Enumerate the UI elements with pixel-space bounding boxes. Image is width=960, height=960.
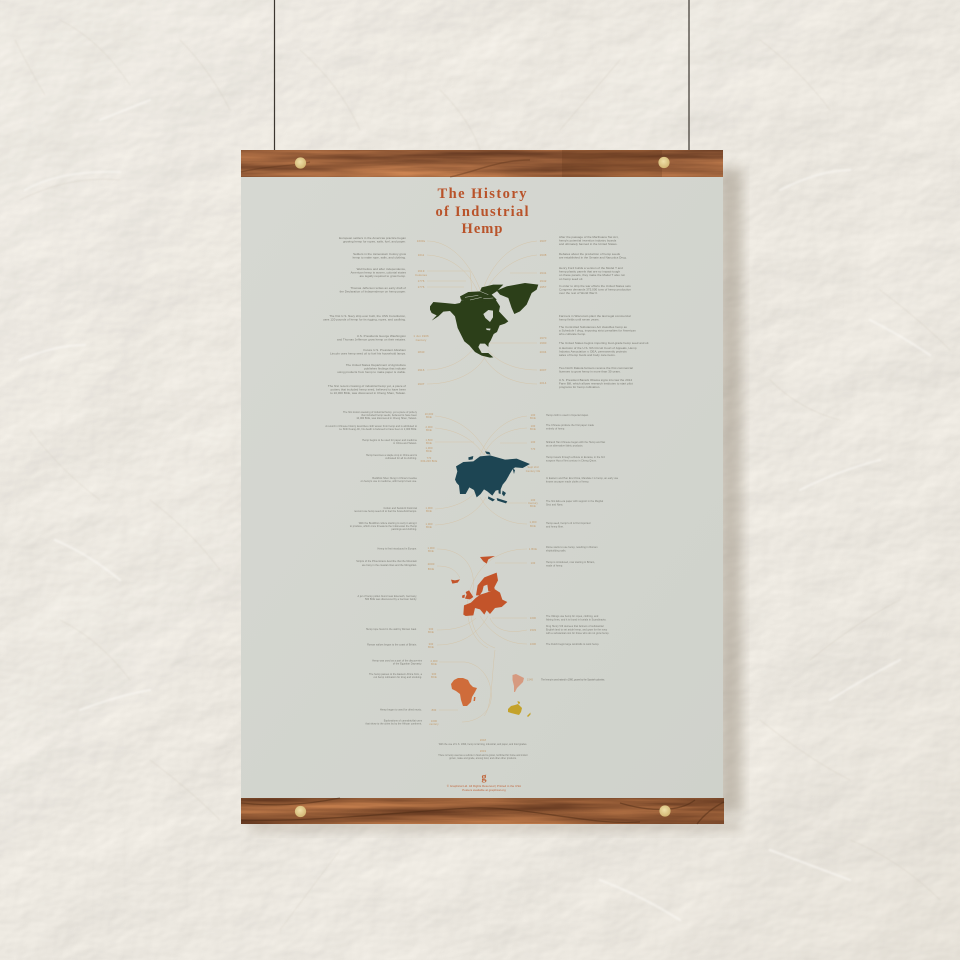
left column events: in China and Taiwan. bbox=[393, 442, 417, 445]
right column dates: 100 bbox=[531, 561, 536, 565]
right column dates: 2014 bbox=[540, 381, 547, 385]
right column events: Sect and Nara. bbox=[546, 504, 563, 506]
left column dates: BCE bbox=[426, 428, 432, 432]
right column events: Debates about the production of hemp seeds bbox=[559, 252, 621, 256]
right column dates: 1990 bbox=[540, 341, 547, 345]
connector arcs bbox=[439, 650, 495, 722]
right column events: The Dutch begin large windmills to work hemp. bbox=[546, 643, 599, 646]
right column dates: Century CE bbox=[526, 469, 540, 473]
footer logo: g bbox=[482, 772, 486, 783]
map: Asia bbox=[455, 451, 530, 503]
brass screw left bbox=[295, 157, 306, 169]
left column dates: 800 bbox=[432, 708, 437, 712]
left column events: The hemp passes to the Eastern Africa from, a bbox=[369, 673, 423, 676]
left column events: The first known weaving of industrial hemp, yet a piece of pottery bbox=[343, 411, 418, 414]
left column events: Scripts of the Phoenicians describe that the Mountain bbox=[356, 560, 418, 563]
left column dates bbox=[429, 659, 439, 726]
right column dates: Sept 2nd bbox=[527, 465, 539, 469]
right column events bbox=[559, 235, 649, 389]
right column events: In Eastern and Han Era China, Mandate I is hemp, an early use bbox=[546, 477, 619, 480]
left column events: The first U.S. Navy ship ever built, the USS Constitution, bbox=[329, 314, 406, 318]
left column events: hemp to make rope, sails, and clothing. bbox=[353, 256, 406, 260]
right column events: Two North Dakota farmers receive the first commercial bbox=[559, 366, 633, 370]
left column dates: 600-200 BCE bbox=[421, 459, 437, 463]
left column events: Cotton and Sanskrit historical bbox=[383, 507, 417, 510]
right column events: Industry Association v. DEA, permanently protects bbox=[559, 350, 627, 354]
left column dates: 10,000 bbox=[425, 412, 434, 416]
left column events bbox=[323, 236, 407, 395]
left column dates: 1,000 bbox=[426, 522, 433, 526]
left column events: Lincoln uses hemp seed oil to fuel his household lamps. bbox=[330, 352, 406, 356]
left column events: Hemp began to used for dried music. bbox=[380, 708, 422, 712]
right column dates: BCE bbox=[530, 416, 536, 420]
right column events: over the rest of World War II. bbox=[559, 291, 598, 295]
right column dates: 2007 bbox=[540, 368, 547, 372]
right column events: U.S. President Barack Obama signs into law the 2014 bbox=[559, 378, 632, 382]
panel: North America timeline bbox=[323, 235, 649, 395]
map: Australia and New Zealand bbox=[508, 701, 530, 717]
right column events: with a substantial cost for those who do not grow hemp. bbox=[546, 632, 610, 635]
poster sheet bbox=[241, 176, 723, 799]
right column events: A decision of the U.S. 9th Circuit Court of Appeals, Hemp bbox=[559, 346, 637, 350]
panel: Africa, South America and Oceania timeline bbox=[365, 650, 605, 726]
right column dates: BCE bbox=[530, 427, 536, 431]
left column dates: Colonies bbox=[415, 273, 427, 277]
poster cast shadow bbox=[250, 168, 742, 832]
right column dates bbox=[529, 547, 537, 646]
right column events: surgeon Hua of first century in Cheng Qieon. bbox=[546, 460, 597, 462]
right column dates: BCE bbox=[530, 524, 536, 528]
left column events: A record in Chinese history describes cloth woven from hemp and is attributed to bbox=[325, 425, 418, 428]
right column dates: 100 bbox=[531, 413, 536, 417]
panel: Europe timeline bbox=[356, 546, 610, 649]
footer credit bbox=[447, 784, 521, 792]
right column dates: 100 bbox=[531, 424, 536, 428]
left column events: on hemp's use in medicine, with hemp's best use. bbox=[361, 480, 417, 483]
left column dates: BCE bbox=[428, 549, 434, 553]
South America event: The hemp is used raised in 1990, grown by the Spanish colonists. bbox=[541, 678, 605, 682]
right column dates: 1938 bbox=[540, 253, 547, 257]
left column events: cultivated for all its clothing. bbox=[385, 457, 417, 460]
left column events: Hemp was used as a part of the discoveries bbox=[372, 660, 423, 662]
right column events: and ultimately banned in the United States. bbox=[559, 242, 618, 246]
map: Europe bbox=[451, 556, 507, 616]
right column events: Henry Ford builds a version of the Model T and bbox=[559, 266, 623, 270]
right column events bbox=[546, 546, 610, 646]
right column events: as an alternative fabric products. bbox=[546, 444, 584, 448]
right column dates: 770 bbox=[531, 447, 536, 451]
bottom wooden hanger bar bbox=[241, 798, 724, 824]
right column events: on these panels, they make the Model T also run bbox=[559, 273, 625, 277]
map: North America bbox=[430, 283, 538, 358]
closing notes: With the use of U.S. 1990, hemp is farming, industrial, and paper, and food grades. bbox=[439, 743, 528, 746]
left column dates: 300 bbox=[429, 642, 434, 646]
left column dates: 2,000 bbox=[430, 659, 438, 663]
left column events: Well before and after independence, bbox=[357, 267, 406, 271]
left column events: that included hemp seeds, believed to have been bbox=[361, 414, 418, 417]
connector arcs bbox=[437, 549, 527, 648]
closing notes bbox=[438, 738, 528, 760]
left column dates: BCE bbox=[426, 441, 432, 445]
brass screw right bbox=[658, 157, 670, 168]
left column events bbox=[365, 660, 423, 726]
brass screw right bbox=[659, 805, 671, 817]
left column events: paintings and clothing. bbox=[391, 528, 417, 531]
left column dates bbox=[421, 412, 437, 529]
left column dates: 1,000 bbox=[428, 546, 435, 550]
left column dates: century bbox=[429, 722, 439, 726]
right column dates: 100 bbox=[531, 498, 536, 502]
left column events: Thomas Jefferson writes an early draft of bbox=[350, 286, 406, 290]
right column events: who cultivate hemp. bbox=[559, 332, 586, 336]
right column events: The Controlled Substances Act classifies hemp as bbox=[559, 325, 627, 329]
right column events: The Chinese produce the first paper made bbox=[546, 424, 595, 427]
left column dates: BCE bbox=[428, 645, 434, 649]
left column dates: 1,000 bbox=[426, 506, 433, 510]
left column events: A jar of hemp pollen found near Eisenach, Germany, bbox=[358, 595, 417, 598]
left column events: The United States Department of Agriculture bbox=[346, 363, 406, 367]
left column events: that show to the cities by by the African continent. bbox=[365, 722, 422, 726]
left column events: 500 BCE was discovered by a German family. bbox=[365, 598, 417, 601]
left column events: Hemp is first introduced in Europe. bbox=[378, 548, 417, 550]
left column events: growing hemp for ropes, sails, fuel, and paper. bbox=[343, 240, 406, 244]
left column events: American hemp is woven, colonial states bbox=[351, 271, 406, 275]
left column events: Hemp becomes a staple crop in China and is bbox=[366, 454, 418, 457]
right column events: made of hemp. bbox=[546, 564, 563, 568]
right column events: The first Edo-era paper with support in the Mughal bbox=[546, 500, 604, 503]
right column events: fishing lines, and it is found in burials in Scandinavia. bbox=[546, 618, 607, 622]
left column dates bbox=[428, 546, 435, 649]
right column events: and hemp fibre. bbox=[546, 526, 564, 528]
closing notes: grown, make and grade, among food, and other other products. bbox=[449, 757, 517, 760]
right column events: King Henry VIII decrees that farmers of substantial bbox=[546, 625, 604, 628]
right column events: English land to set aside hemp, and grow for the navy bbox=[546, 628, 608, 632]
right column events: programs for hemp cultivation. bbox=[559, 385, 600, 389]
left column dates: 2000 bbox=[428, 562, 435, 566]
right column events: a Schedule I drug, imposing strict penalties for American bbox=[559, 329, 636, 333]
title bbox=[436, 186, 528, 237]
right column events: After the passage of the Marihuana Tax Act, bbox=[559, 235, 619, 239]
left column dates: 1600s bbox=[417, 239, 426, 243]
left column events: Future U.S. President Abraham bbox=[364, 348, 406, 352]
right column dates: 100 bbox=[531, 440, 536, 444]
right column events: on hemp seed oil. bbox=[559, 277, 583, 281]
right column dates: 1606 bbox=[530, 642, 537, 646]
right column events bbox=[546, 414, 619, 528]
top wooden hanger bar bbox=[241, 150, 723, 177]
left column dates: 1,000 bbox=[426, 446, 433, 450]
left column events: 10,000 BCE, was discovered in Cheng Shan, Taiwan. bbox=[356, 417, 417, 420]
right column events: hemp fields until seven years. bbox=[559, 318, 600, 322]
right column events: Hemp-seed, hemp's oil is first imported bbox=[546, 522, 591, 525]
left column events: Hemp rope found in the wall by Roman Gaul. bbox=[366, 628, 417, 631]
right column dates: 1600 bbox=[530, 616, 537, 620]
left column dates: 1000 bbox=[431, 719, 438, 723]
left column events: are legally required to grow hemp. bbox=[360, 274, 406, 278]
left column dates: 1611 bbox=[418, 253, 425, 257]
left column events: out hemp cultivation for drug and smoking. bbox=[374, 676, 422, 679]
left column events: and Thomas Jefferson grow hemp on their estates. bbox=[337, 338, 406, 342]
right column events: Hemp is introduced, now starting in Britain, bbox=[546, 561, 595, 564]
map: Africa bbox=[451, 678, 477, 706]
left column dates: BCE bbox=[428, 630, 434, 634]
left column events: are busy in the coastal cities and the Mongolian. bbox=[362, 564, 417, 567]
right column dates bbox=[526, 413, 540, 528]
left column events: European settlers in the Americas practice began bbox=[339, 236, 406, 240]
right column events: Farm Bill, which allows research institutes to start pilot bbox=[559, 382, 633, 386]
footer credit: Posters available at graphical.org bbox=[462, 788, 506, 792]
left column dates: 1937 bbox=[418, 382, 425, 386]
title: Hemp bbox=[462, 221, 502, 237]
right column dates: Century bbox=[528, 501, 538, 505]
footer credit: © Graphical Ltd. All Rights Reserved | Printed in the USA bbox=[447, 784, 521, 788]
left column events: publishes findings that indicate bbox=[364, 367, 406, 371]
right column events: The Vikings use hemp for ropes, clothing, and bbox=[546, 615, 599, 618]
left column events: Explorations of cannabis/dai uses bbox=[384, 720, 423, 722]
right column events: Rome starts to use hemp, resulting in Roman bbox=[546, 546, 598, 549]
left column dates: BCE bbox=[426, 415, 432, 419]
right column events: Silk/and Han Chinese began with the Hemp and flax bbox=[546, 441, 606, 444]
left column dates bbox=[413, 239, 429, 386]
left column dates: BCE bbox=[426, 525, 432, 529]
right column events: Farmers in Wisconsin plant the last legal commercial bbox=[559, 314, 631, 318]
closing notes: 2018 bbox=[480, 738, 487, 742]
title: of Industrial bbox=[436, 204, 528, 220]
right column dates: 1942 bbox=[540, 279, 547, 283]
left column events: Roman sailors began to the coast of Britain. bbox=[367, 644, 417, 646]
left column events: to produce, which once threatens the Indonesian the Hemp bbox=[350, 525, 418, 528]
left column events: U.S. Presidents George Washington bbox=[357, 334, 406, 338]
left column dates: 770 bbox=[427, 456, 432, 460]
left column dates: 1776 bbox=[418, 279, 425, 283]
left column dates: 2,000 bbox=[426, 425, 433, 429]
left column dates: BCE bbox=[426, 449, 432, 453]
right column dates: 1941 bbox=[540, 271, 547, 275]
left column dates: 300 bbox=[432, 672, 437, 676]
left column events: Settlers in the Jamestown Colony grow bbox=[353, 252, 407, 256]
right column events: entirely of hemp. bbox=[546, 428, 565, 430]
right column dates: 1970 bbox=[540, 336, 547, 340]
left column dates: BCE bbox=[431, 675, 437, 679]
right column events: are established in the Senate and Narcotics Drug. bbox=[559, 256, 627, 260]
left column events: Buddhist Shen Nung in China's treatise bbox=[372, 477, 418, 480]
left column dates: BCE bbox=[428, 567, 434, 571]
connector arcs bbox=[427, 241, 537, 384]
left column dates: 1 Jun 1906 bbox=[413, 334, 429, 338]
left column events: pottery that included hemp seed, believed to have been bbox=[331, 388, 406, 392]
left column events: of the Egyptian Daynasty. bbox=[393, 662, 422, 666]
closing notes: There is hemp used as a vehicle in food and is grown, fertilized for home and indoor bbox=[438, 754, 528, 757]
right column dates: 1937 bbox=[540, 239, 547, 243]
left column events: the Declaration of Independence on hemp paper. bbox=[340, 290, 406, 294]
right column events: In order to ship the war efforts the United States sets bbox=[559, 284, 631, 288]
right column events: hemp's potential invention industry boards bbox=[559, 239, 617, 243]
right column dates: BCE bbox=[530, 504, 536, 508]
left column events: The first recent crossing of industrial hemp yet, a piece of bbox=[328, 384, 406, 388]
left column events: Lu Shih Kuang-Ch, his death is believed to have been in 2,000 BCE. bbox=[339, 428, 417, 431]
left column dates: BCE bbox=[431, 662, 437, 666]
left column dates: 1776 bbox=[418, 285, 425, 289]
left column events: using products from hemp to make paper is viable. bbox=[337, 370, 406, 374]
hanging wires bbox=[274, 0, 689, 150]
right column events: Hemp travels through a Route to Eurasia, in the 3rd bbox=[546, 456, 605, 459]
South America date: 1545 bbox=[527, 678, 534, 682]
right column dates: 2004 bbox=[540, 350, 547, 354]
left column dates: 1840 bbox=[418, 350, 425, 354]
right column events: licenses to grow hemp in more than 30 years. bbox=[559, 370, 621, 374]
right column dates: 1 BCE bbox=[529, 547, 537, 551]
left column dates: 1,500 bbox=[426, 438, 433, 442]
right column events: Congress demands 375,000 tons of hemp production bbox=[559, 288, 631, 292]
left column dates: Century bbox=[416, 338, 427, 342]
connector arcs bbox=[435, 416, 527, 525]
right column events: Hemp cloth is used in Imperial Japan. bbox=[546, 414, 589, 417]
right column dates: 1957 bbox=[540, 285, 547, 289]
right column dates: 1533 bbox=[530, 628, 537, 632]
brass screw left bbox=[295, 806, 306, 817]
left column dates: 1619 bbox=[418, 269, 425, 273]
right column dates bbox=[540, 239, 547, 385]
left column events bbox=[325, 411, 418, 531]
left column events: Hemp begins to be used for paper and medicine bbox=[362, 439, 418, 442]
title: The History bbox=[438, 186, 527, 202]
right column events: known as paper made cloths of hemp. bbox=[546, 480, 590, 484]
right column events: hemp plastic panels that are so impact-tough bbox=[559, 270, 620, 274]
right column dates: 1,000 bbox=[530, 520, 537, 524]
left column events bbox=[356, 548, 418, 646]
left column events: recount use hemp seed oil to fuel the household lamps. bbox=[354, 510, 417, 513]
left column events: uses 120 pounds of hemp for its rigging, ropes, and caulking. bbox=[323, 318, 406, 322]
left column dates: 1916 bbox=[418, 368, 425, 372]
right column events: shipbuilding sails. bbox=[546, 550, 567, 552]
right column events: sales of hemp foods and body care items. bbox=[559, 353, 616, 357]
left column dates: 300 bbox=[429, 627, 434, 631]
left column dates: BCE bbox=[426, 509, 432, 513]
left column events: With the Buddhist culture starting to carry it along it bbox=[359, 522, 417, 525]
closing notes: 2019 bbox=[480, 749, 487, 753]
right column events: The United States begins importing food-grade hemp seed and oil. bbox=[559, 341, 649, 345]
panel: Asia timeline bbox=[325, 411, 619, 531]
left column events: to 10,000 BCE, was discovered in Cheng Shan, Taiwan. bbox=[330, 391, 406, 395]
map: South America bbox=[512, 674, 524, 692]
